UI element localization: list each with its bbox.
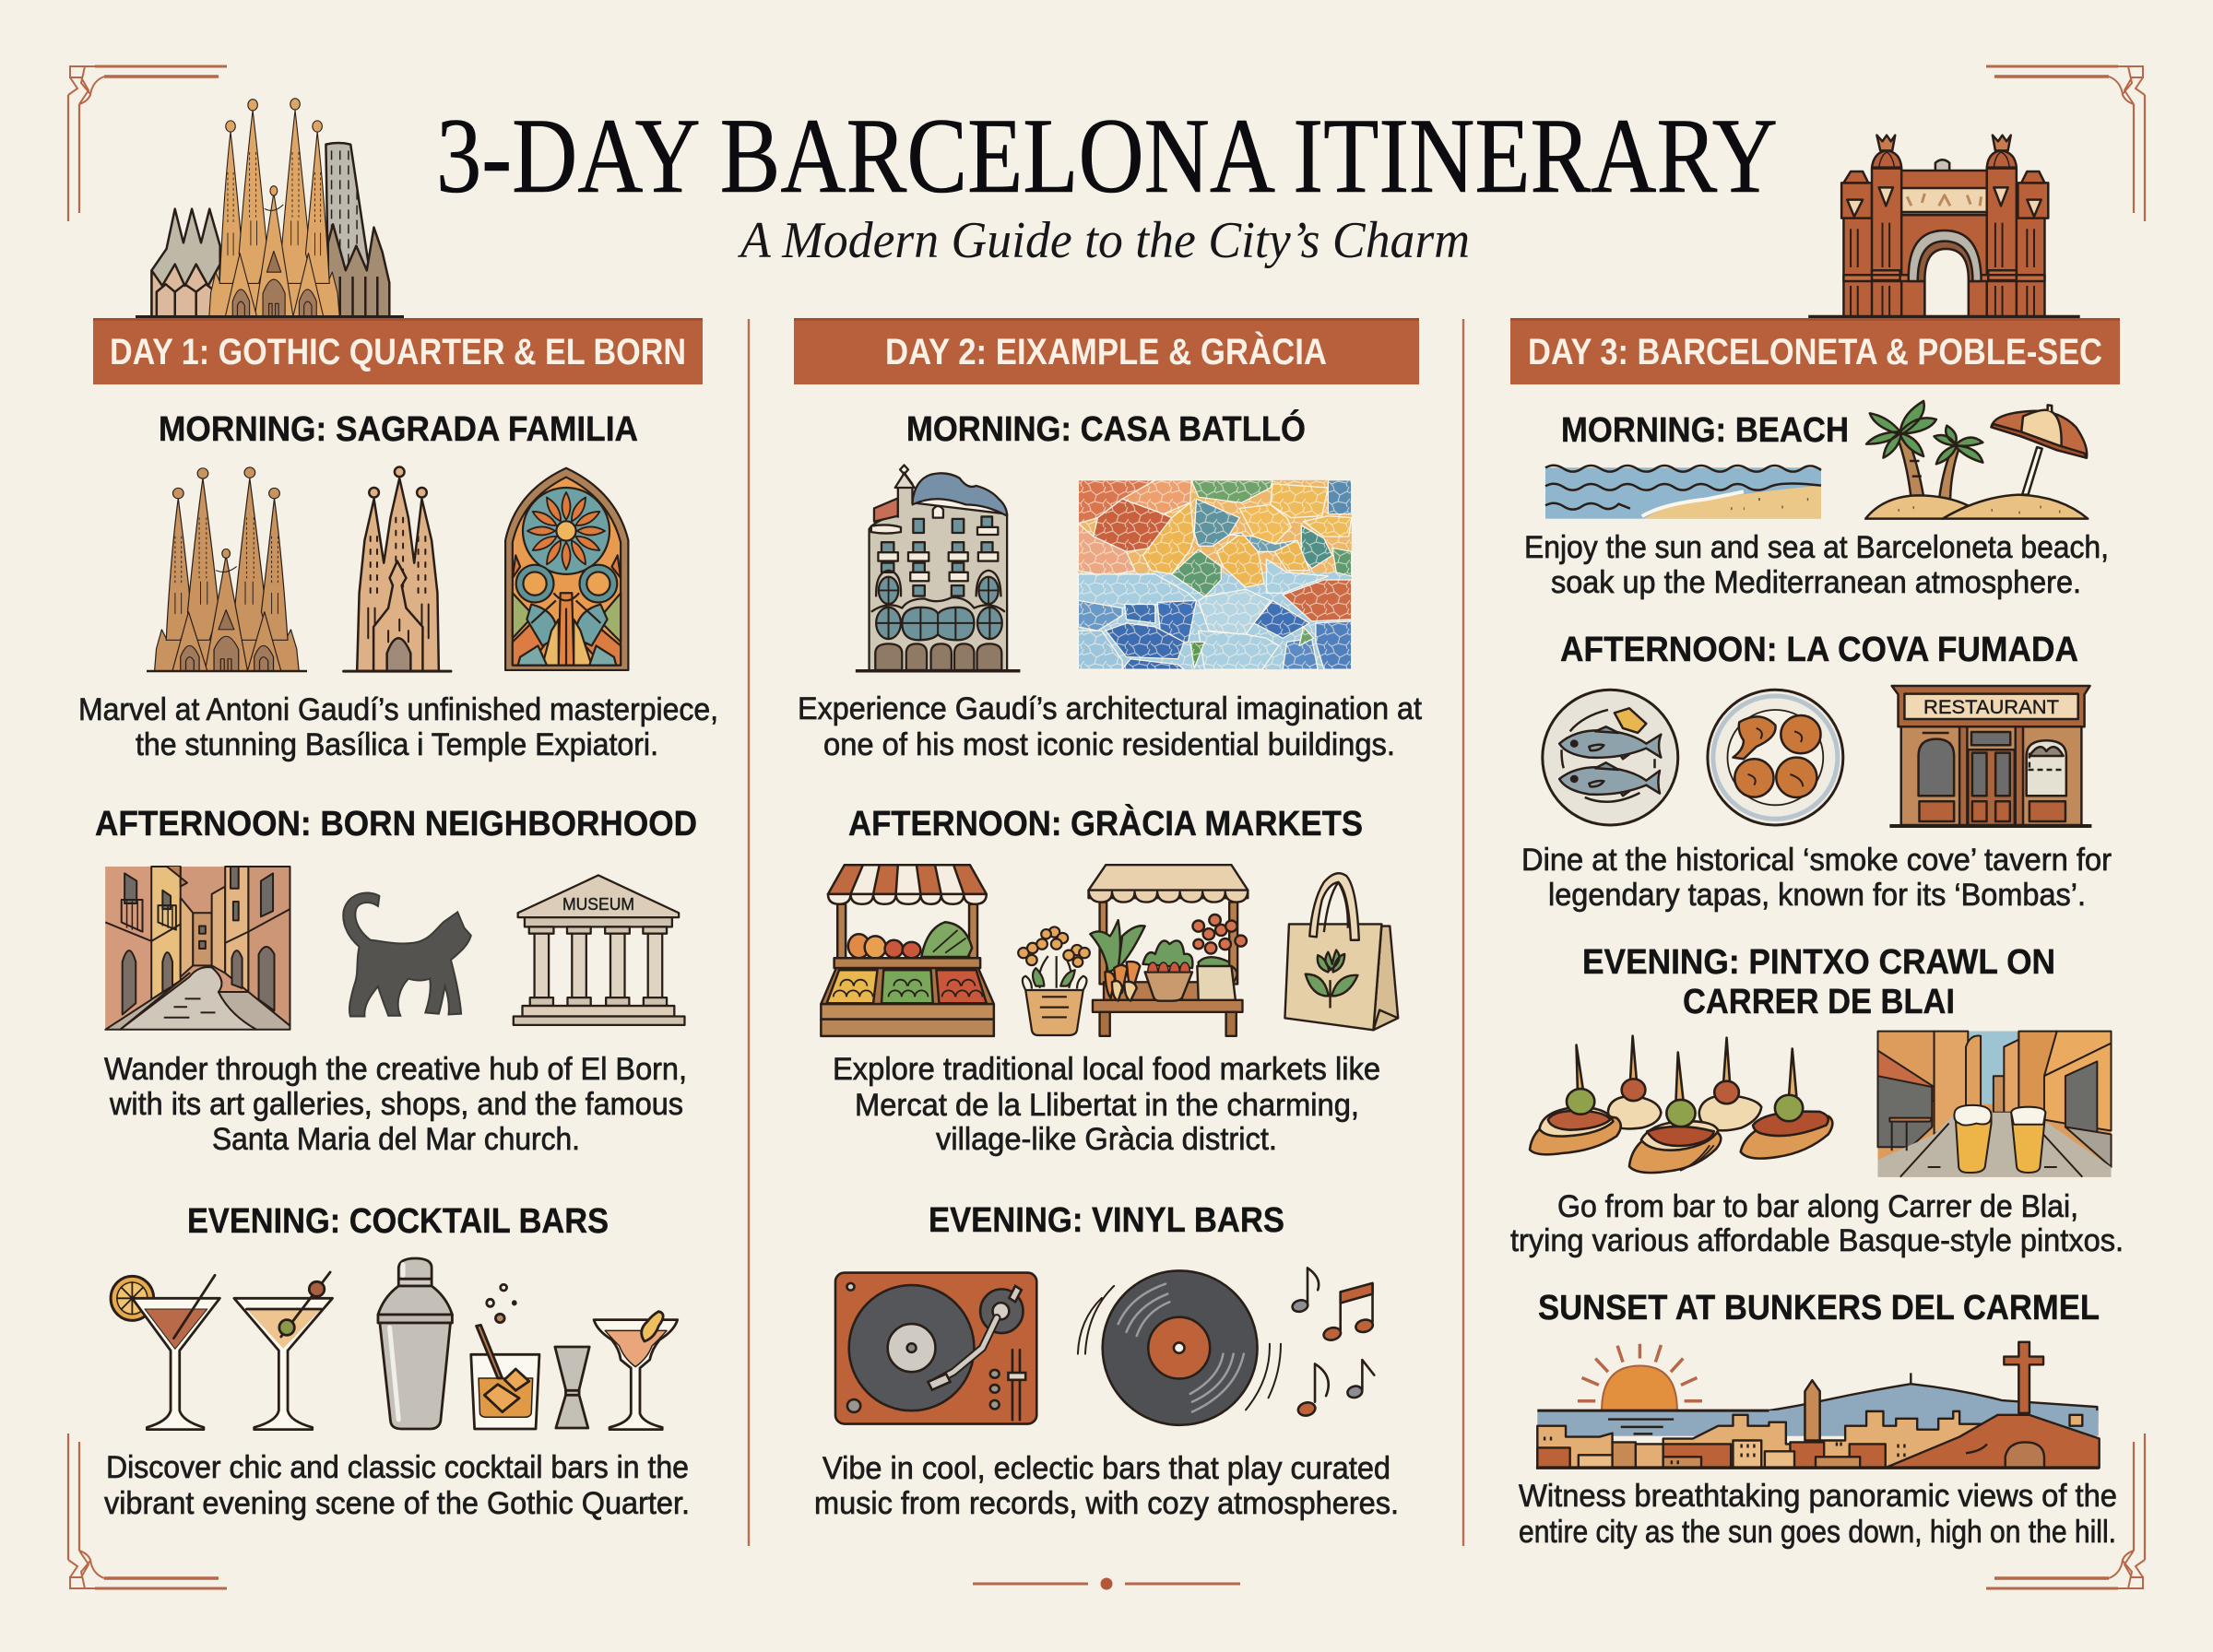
text: morning beach: soak up the Mediterranean atmosphere. [1551, 565, 2081, 600]
heading: afternoon La Cova Fumada: AFTERNOON: LA COVA FUMADA [1560, 631, 2078, 669]
heading: evening cocktail bars: EVENING: COCKTAIL BARS [187, 1202, 609, 1241]
text: sunset: Witness breathtaking panoramic views of the [1519, 1479, 2117, 1514]
icon: Sagrada Familia side [344, 467, 451, 671]
text: afternoon Gracia: Explore traditional local food markets like [833, 1052, 1380, 1087]
text: evening pintxos: Go from bar to bar along Carrer de Blai, [1557, 1189, 2078, 1224]
text: afternoon La Cova Fumada [1521, 843, 2112, 913]
text: afternoon Gracia [833, 1052, 1380, 1157]
icon: music notes [1291, 1268, 1374, 1418]
text: afternoon Born: Santa Maria del Mar church. [212, 1122, 580, 1157]
banner: day 2: DAY 2: EIXAMPLE & GRÀCIA [885, 331, 1327, 372]
heading: morning Sagrada Familia: MORNING: SAGRADA FAMILIA [159, 410, 638, 449]
icon: cocktails and shaker [111, 1258, 678, 1430]
icon: fruit market stall [821, 865, 994, 1036]
text: morning Casa Batllo: Experience Gaudí’s architectural imagination at [798, 691, 1423, 726]
text: afternoon Born: with its art galleries, shops, and the famous [109, 1087, 683, 1122]
heading: evening pintxo crawl [1582, 943, 2055, 1021]
heading: afternoon Gracia markets: AFTERNOON: GRÀCIA MARKETS [848, 803, 1363, 844]
bottom centre ornament [973, 1578, 1240, 1589]
title: 3-DAY BARCELONA ITINERARY [436, 97, 1778, 216]
text: evening pintxos [1510, 1189, 2124, 1258]
heading: morning Casa Batllo: MORNING: CASA BATLLÓ [906, 408, 1306, 449]
icon: black cat [343, 892, 471, 1017]
heading: morning beach: MORNING: BEACH [1561, 411, 1849, 450]
banner: day 1: DAY 1: GOTHIC QUARTER & EL BORN [110, 332, 686, 372]
banner: day 1 [93, 318, 703, 384]
text: morning Sagrada Familia: the stunning Basílica i Temple Expiatori. [136, 727, 658, 762]
text: afternoon La Cova Fumada: legendary tapas, known for its ‘Bombas’. [1548, 878, 2086, 913]
icon: restaurant facade [1889, 686, 2091, 826]
text: afternoon Born: Wander through the creative hub of El Born, [104, 1052, 687, 1087]
corner ornament: top right [1986, 66, 2145, 221]
icon: Casa Batllo [856, 465, 1020, 671]
text: afternoon Born [104, 1052, 687, 1157]
text: evening vinyl: Vibe in cool, eclectic bars that play curated [822, 1451, 1391, 1486]
heading: evening vinyl bars: EVENING: VINYL BARS [929, 1201, 1284, 1240]
icon: vinyl record [1078, 1270, 1281, 1425]
icon: flower pot [1018, 926, 1090, 1035]
icon: sea and shore [1545, 466, 1821, 519]
text: afternoon La Cova Fumada: Dine at the historical ‘smoke cove’ tavern for [1521, 843, 2112, 878]
text: morning beach: Enjoy the sun and sea at Barceloneta beach, [1524, 530, 2109, 565]
subtitle: A Modern Guide to the City’s Charm [737, 212, 1470, 269]
icon: pintxos [1530, 1036, 1832, 1173]
text: morning Sagrada Familia [78, 692, 718, 762]
text: morning beach [1524, 530, 2109, 600]
icon: trencadis mosaic [1078, 480, 1352, 669]
icon: museum building: MUSEUM [562, 895, 634, 914]
corner ornament: bottom left [68, 1434, 227, 1588]
text: evening cocktails: vibrant evening scene of the Gothic Quarter. [104, 1486, 690, 1521]
icon: sunset panorama [1536, 1342, 2100, 1468]
heading: sunset at Bunkers del Carmel: SUNSET AT BUNKERS DEL CARMEL [1538, 1289, 2100, 1328]
icon: museum building [514, 875, 684, 1025]
icon: turntable [835, 1273, 1036, 1424]
heading: afternoon Born neighborhood: AFTERNOON: BORN NEIGHBORHOOD [95, 805, 697, 844]
icon: header Arc de Triomf [1808, 136, 2080, 317]
icon: restaurant facade: RESTAURANT [1923, 697, 2059, 718]
corner ornament: top left [68, 66, 227, 221]
icon: plate of sardines [1543, 690, 1678, 825]
icon: Sagrada Familia front [147, 467, 307, 671]
icon: header Sagrada Familia skyline [136, 99, 404, 317]
text: morning Casa Batllo [798, 691, 1423, 762]
text: evening cocktails: Discover chic and classic cocktail bars in the [106, 1450, 689, 1485]
text: sunset: entire city as the sun goes down, high on the hill. [1519, 1515, 2116, 1550]
banner: day 3 [1510, 318, 2120, 384]
icon: stained glass window [505, 468, 628, 670]
banner: day 3: DAY 3: BARCELONETA & POBLE-SEC [1528, 332, 2102, 372]
text: morning Sagrada Familia: Marvel at Antoni Gaudí’s unfinished masterpiece, [78, 692, 718, 727]
text: evening pintxos: trying various affordable Basque-style pintxos. [1510, 1223, 2124, 1258]
text: sunset [1519, 1479, 2117, 1550]
banner: day 2 [794, 318, 1419, 384]
text: afternoon Gracia: Mercat de la Llibertat in the charming, [855, 1088, 1359, 1123]
corner ornament: bottom right [1986, 1434, 2145, 1588]
icon: palm trees and umbrella [1865, 401, 2088, 519]
icon: tote bag [1284, 873, 1398, 1030]
heading: evening pintxo crawl: EVENING: PINTXO CRAWL ON [1582, 943, 2055, 982]
heading: evening pintxo crawl: CARRER DE BLAI [1683, 983, 1955, 1021]
text: evening vinyl [814, 1451, 1399, 1521]
text: evening cocktails [104, 1450, 690, 1521]
text: morning Casa Batllo: one of his most iconic residential buildings. [823, 727, 1395, 762]
icon: plate of bombas [1708, 690, 1843, 825]
icon: El Born alley [105, 867, 290, 1030]
text: afternoon Gracia: village-like Gràcia district. [936, 1122, 1277, 1157]
icon: vegetable and flower stall [1089, 865, 1248, 1036]
text: evening vinyl: music from records, with cozy atmospheres. [814, 1486, 1399, 1521]
icon: street with beers [1877, 1032, 2112, 1177]
